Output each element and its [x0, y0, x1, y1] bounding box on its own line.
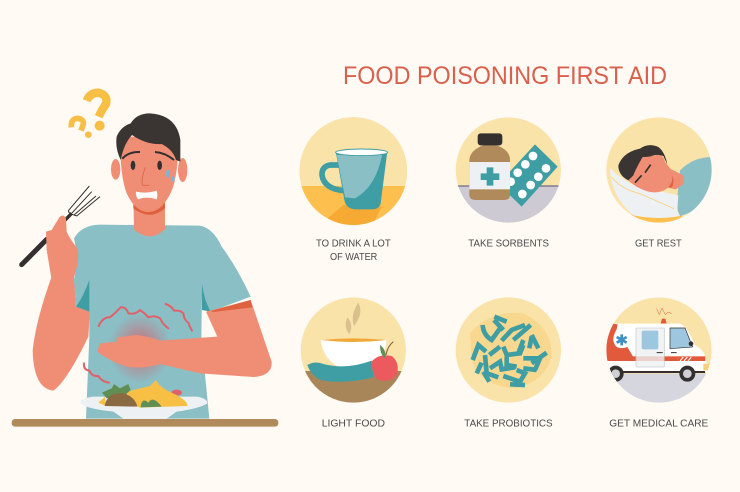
- right arm and hand: [97, 300, 272, 377]
- title: FOOD POISONING FIRST AID: [343, 62, 667, 90]
- sleeve band: [211, 300, 252, 312]
- hair: [116, 113, 180, 162]
- label: get medical care: GET MEDICAL CARE: [609, 418, 708, 430]
- icon: ambulance: [606, 298, 712, 403]
- icon: sorbents bottle and blister: [453, 117, 563, 225]
- plate and food: [80, 380, 207, 419]
- table: [12, 419, 278, 427]
- sleeve shadows: [76, 280, 211, 312]
- bottom row icons: [300, 297, 713, 407]
- t-shirt: [74, 225, 251, 419]
- label: to drink a lot of water: [316, 238, 391, 263]
- label: light food: LIGHT FOOD: [322, 418, 385, 430]
- ears: [111, 159, 120, 180]
- sweat drops: [166, 170, 175, 182]
- label: take sorbents: TAKE SORBENTS: [468, 238, 549, 250]
- squiggles: [84, 304, 192, 383]
- left arm: [33, 277, 90, 391]
- face: [120, 137, 178, 212]
- icon: mug of water: [297, 117, 410, 229]
- icon: light food: [300, 297, 407, 404]
- labels: [316, 238, 708, 430]
- mouth: [136, 191, 157, 199]
- top row icons: [297, 117, 712, 229]
- label: take probiotics: TAKE PROBIOTICS: [464, 418, 553, 430]
- label: to drink a lot of water: TO DRINK A LOT: [316, 238, 391, 250]
- label: to drink a lot of water: OF WATER: [330, 251, 378, 263]
- icon: man resting on pillow: [606, 117, 712, 224]
- left fist: [46, 216, 78, 280]
- icon: question marks: [71, 93, 106, 138]
- label: get rest: GET REST: [635, 238, 682, 250]
- illustration: worried man with fork and plate: [12, 93, 278, 427]
- icon: probiotics: [456, 297, 561, 403]
- eyes and brows: [122, 152, 174, 185]
- neck: [133, 197, 165, 236]
- neck shadow: [133, 202, 165, 215]
- pain glow: [108, 313, 172, 383]
- fork: [22, 186, 100, 265]
